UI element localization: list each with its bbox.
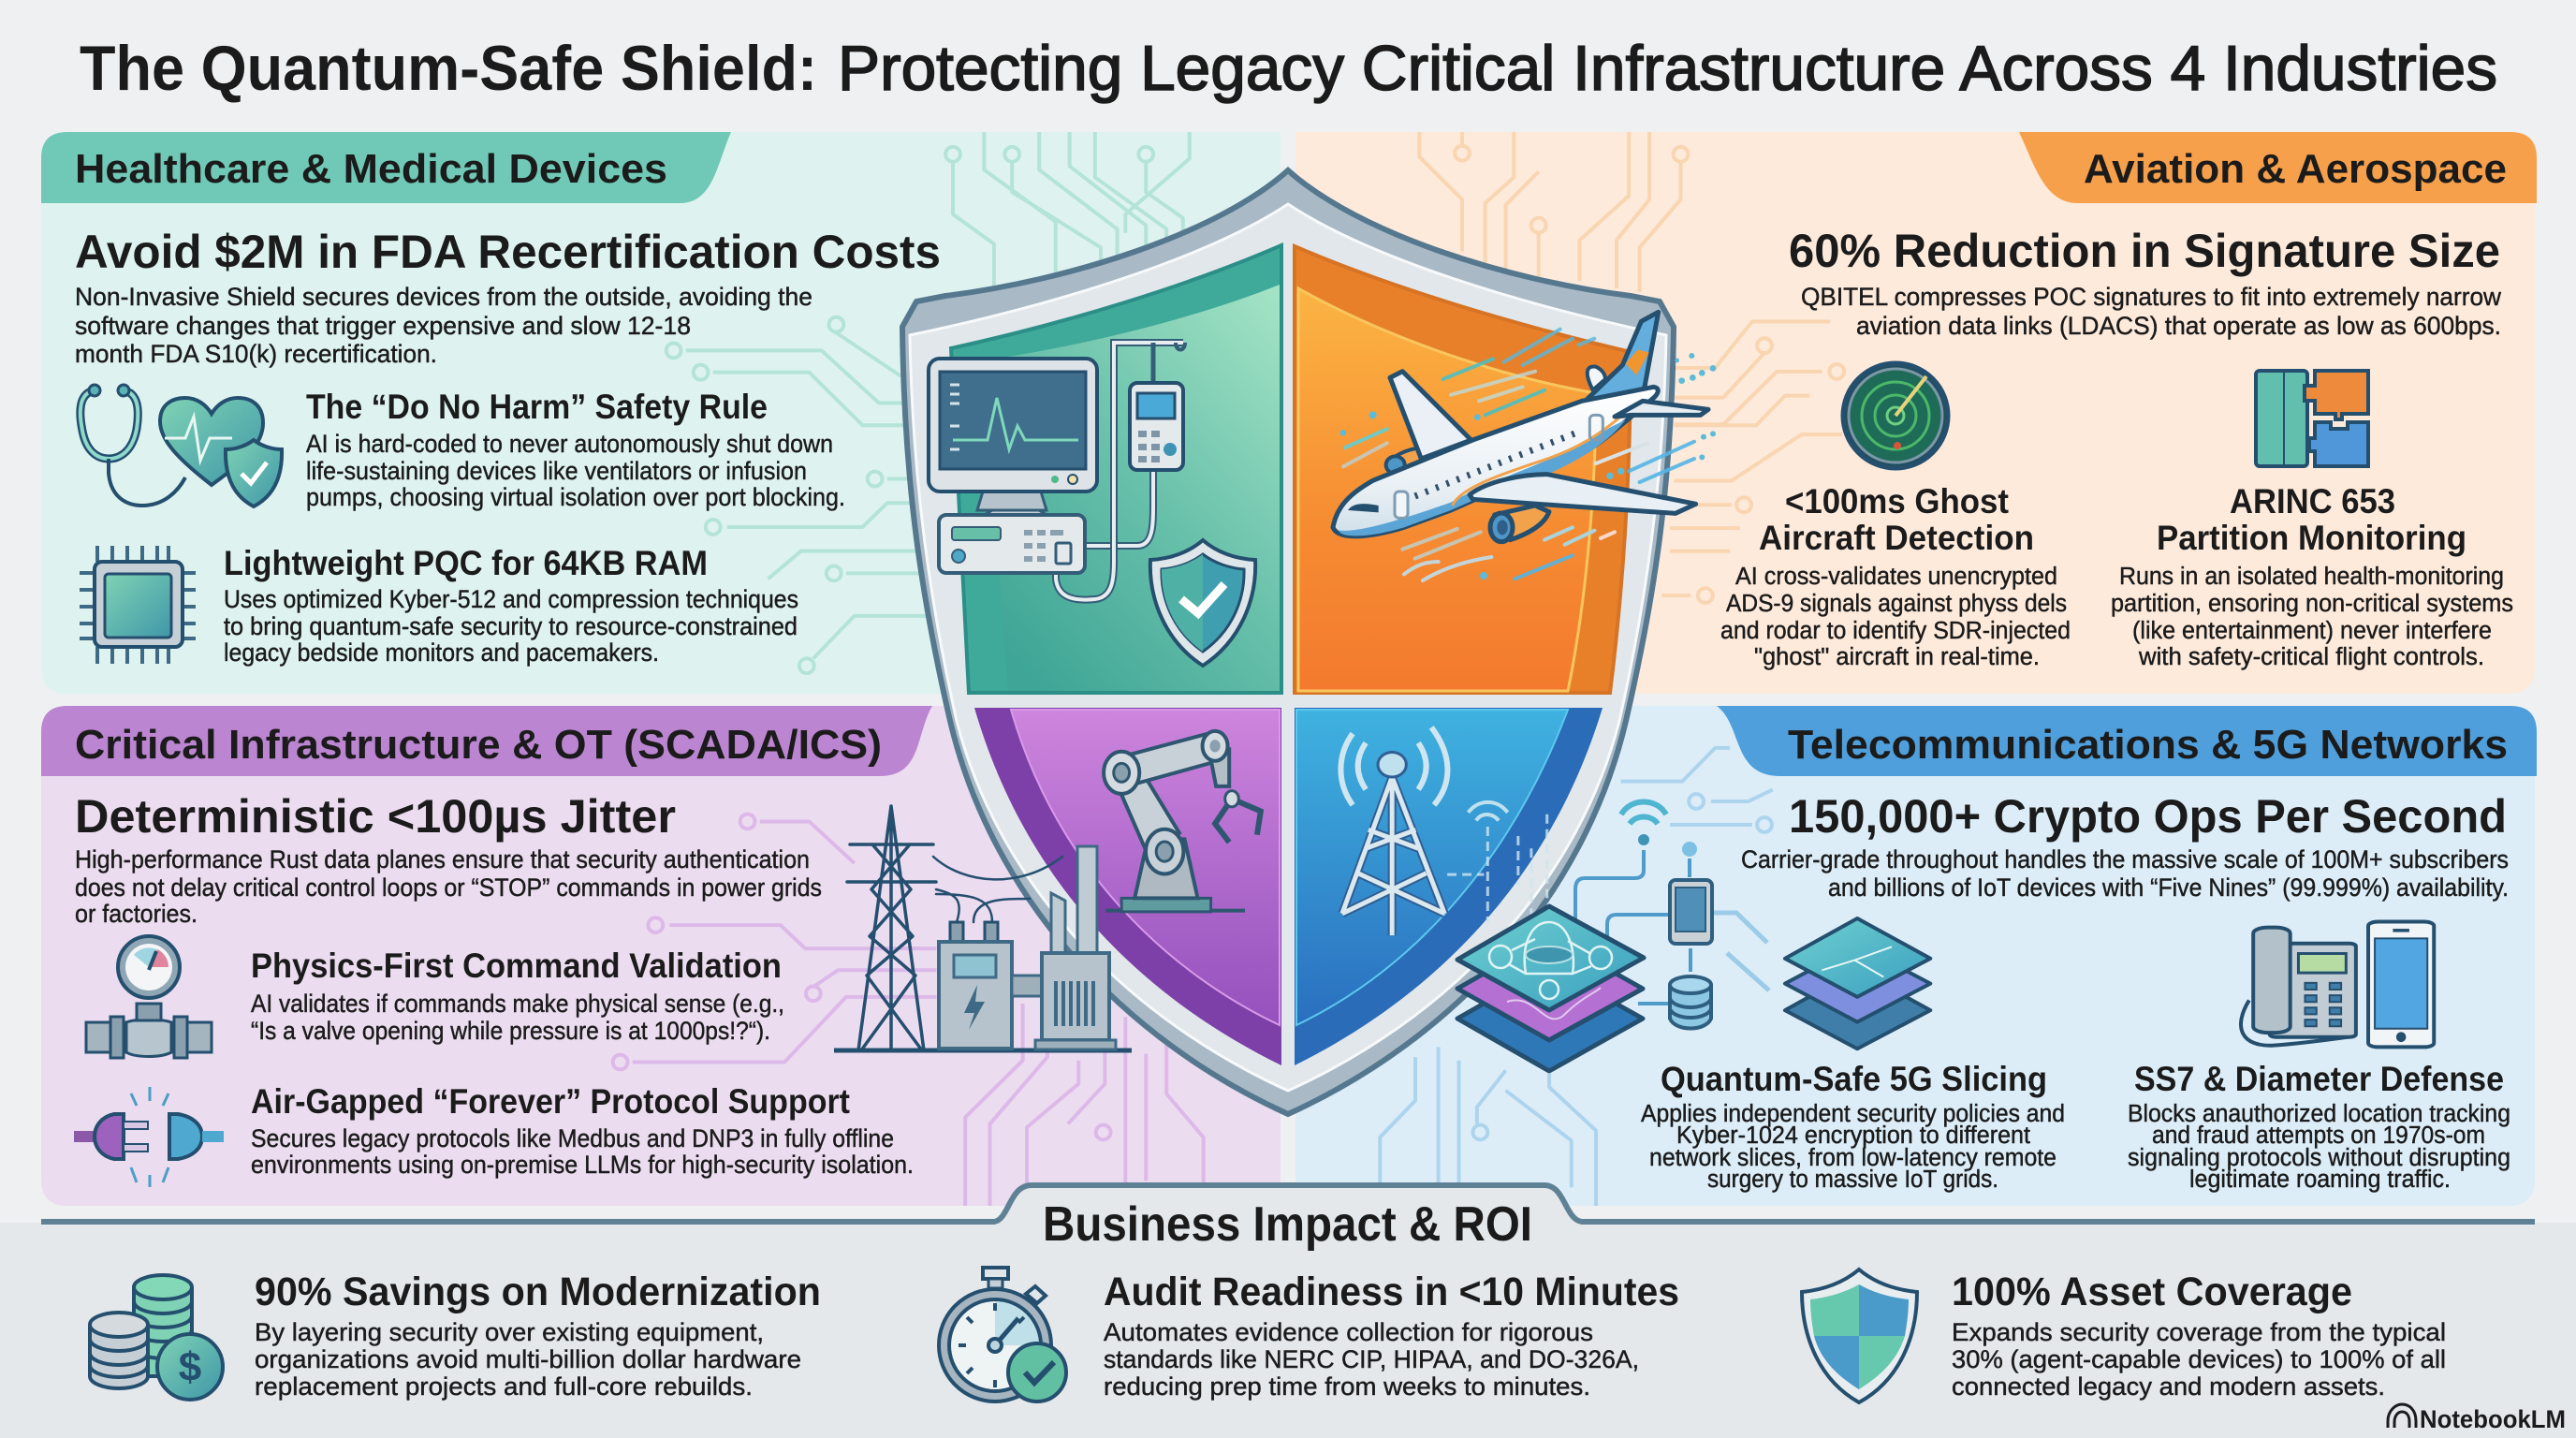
telecom section heading: Telecommunications & 5G Networks — [1788, 722, 2508, 768]
aviation headline: 60% Reduction in Signature Size — [1789, 225, 2500, 277]
near wing — [1470, 475, 1696, 513]
brand mark: NotebookLM: NotebookLM — [2420, 1405, 2566, 1433]
aviation header tab — [2019, 132, 2537, 203]
illustration: network slices and devices — [1457, 801, 1769, 1071]
icon: check shield in healthcare quadrant — [1150, 540, 1255, 666]
feature: ARINC 653 partition monitoring: partition, ensoring non-critical systems — [2111, 591, 2513, 617]
near engine — [1495, 506, 1549, 540]
critical infrastructure header tab — [41, 706, 932, 776]
telecom description: and billions of IoT devices with “Five Nines” (99.999%) availability. — [1828, 873, 2509, 902]
healthcare description: month FDA S10(k) recertification. — [75, 340, 437, 368]
feature: ghost aircraft detection: ADS-9 signals against physs dels — [1726, 591, 2067, 617]
feature: quantum-safe 5G slicing — [1641, 1060, 2065, 1193]
connector traces — [1575, 850, 1690, 1004]
feature: lightweight PQC — [224, 544, 798, 667]
title: The Quantum-Safe Shield: — [80, 33, 817, 104]
panel: healthcare and medical devices — [41, 132, 1281, 694]
feature: quantum-safe 5G slicing: surgery to massive IoT grids. — [1707, 1167, 1998, 1193]
icon: stethoscope, heart and shield — [80, 385, 282, 506]
telecom circuit traces — [1380, 748, 1773, 1206]
critical infrastructure panel background — [41, 706, 1281, 1206]
icon: radar — [1843, 363, 1948, 468]
icon: quartered shield — [1802, 1269, 1917, 1402]
transformer — [939, 922, 1042, 1049]
feature: lightweight PQC: Lightweight PQC for 64KB RAM — [224, 544, 708, 582]
feature: SS7 and Diameter defense: and fraud attempts on 1970s-om — [2152, 1123, 2485, 1149]
feature: quantum-safe 5G slicing: Kyber-1024 encryption to different — [1676, 1123, 2030, 1149]
icon: pressure gauge on valve — [86, 936, 212, 1058]
feature: ghost aircraft detection: "ghost" aircraft in real-time. — [1754, 644, 2040, 670]
stat: savings on modernization: By layering security over existing equipment, — [255, 1318, 764, 1346]
feature: ARINC 653 partition monitoring: Runs in an isolated health-monitoring — [2119, 564, 2504, 590]
icon: network slice stack — [1785, 918, 1930, 1049]
feature: air-gapped protocol support — [251, 1082, 914, 1179]
feature: do no harm safety rule: pumps, choosing virtual isolation over port blocking. — [306, 483, 845, 511]
feature: quantum-safe 5G slicing: network slices, from low-latency remote — [1649, 1145, 2056, 1171]
feature: physics-first command validation: “Is a valve opening while pressure is at 1000ps!?“). — [251, 1017, 770, 1045]
illustration: patient monitor and infusion pump — [929, 343, 1185, 600]
shield quadrant: healthcare — [951, 245, 1281, 693]
healthcare description — [75, 283, 812, 368]
feature: ARINC 653 partition monitoring: with safety-critical flight controls. — [2138, 644, 2484, 670]
stat: savings on modernization: replacement projects and full-core rebuilds. — [255, 1372, 753, 1401]
feature: air-gapped protocol support: environments using on-premise LLMs for high-security isolation. — [251, 1151, 914, 1179]
shield quadrant: critical infrastructure — [974, 708, 1281, 1065]
feature: ARINC 653 partition monitoring — [2111, 482, 2513, 670]
database — [1670, 985, 1711, 1028]
wifi icon — [1621, 801, 1666, 824]
critical infrastructure description: High-performance Rust data planes ensure that security authentication — [75, 845, 810, 873]
feature: ghost aircraft detection: <100ms Ghost — [1785, 482, 2009, 521]
bottom band background — [0, 1185, 2576, 1438]
feature: do no harm safety rule: life-sustaining devices like ventilators or infusion — [306, 457, 807, 485]
stat: audit readiness — [1104, 1269, 1679, 1401]
critical infrastructure section heading: Critical Infrastructure & OT (SCADA/ICS) — [75, 722, 882, 768]
small phone — [1670, 880, 1712, 944]
stat: savings on modernization: organizations avoid multi-billion dollar hardware — [255, 1345, 801, 1373]
feature: lightweight PQC: to bring quantum-safe security to resource-constrained — [224, 612, 798, 640]
panel: business impact and ROI — [0, 1185, 2576, 1438]
aviation description: aviation data links (LDACS) that operate as low as 600bps. — [1856, 312, 2501, 340]
feature: SS7 and Diameter defense — [2128, 1060, 2510, 1193]
stat: asset coverage: 100% Asset Coverage — [1952, 1269, 2352, 1314]
illustration: power tower and substation — [834, 806, 1132, 1050]
feature: lightweight PQC: legacy bedside monitors and pacemakers. — [224, 638, 659, 667]
critical infrastructure description: does not delay critical control loops or “STOP” commands in power grids — [75, 873, 822, 902]
feature: do no harm safety rule: The “Do No Harm” Safety Rule — [306, 388, 768, 426]
stat: audit readiness: Automates evidence collection for rigorous — [1104, 1318, 1593, 1346]
critical infrastructure description: or factories. — [75, 900, 198, 928]
feature: ghost aircraft detection: and rodar to identify SDR-injected — [1720, 618, 2071, 644]
telecom header tab — [1717, 706, 2537, 776]
healthcare header tab — [41, 132, 731, 203]
panel: aviation and aerospace — [1295, 132, 2537, 694]
telecom headline: 150,000+ Crypto Ops Per Second — [1789, 790, 2507, 843]
stat: asset coverage: 30% (agent-capable devices) to 100% of all — [1952, 1345, 2446, 1373]
critical infrastructure headline: Deterministic <100µs Jitter — [75, 790, 676, 843]
purple slice — [1457, 936, 1643, 1040]
feature: physics-first command validation: Physics-First Command Validation — [251, 946, 782, 985]
feature: air-gapped protocol support: Secures legacy protocols like Medbus and DNP3 in fully offline — [251, 1124, 894, 1152]
feature: quantum-safe 5G slicing: Quantum-Safe 5G Slicing — [1661, 1060, 2047, 1098]
stat: savings on modernization — [255, 1269, 821, 1401]
shield quadrant: telecommunications — [1295, 708, 1603, 1065]
telecom panel background — [1295, 706, 2535, 1206]
feature: physics-first command validation: AI validates if commands make physical sense (e.g., — [251, 990, 784, 1018]
feature: ghost aircraft detection: Aircraft Detection — [1759, 519, 2034, 557]
small tail fillet — [1588, 366, 1605, 390]
illustration: telecom tower — [1340, 727, 1547, 935]
feature: air-gapped protocol support: Air-Gapped “Forever” Protocol Support — [251, 1082, 850, 1121]
feature: SS7 and Diameter defense: Blocks anauthorized location tracking — [2128, 1101, 2510, 1127]
feature: physics-first command validation — [251, 946, 784, 1045]
feature: ghost aircraft detection: AI cross-validates unencrypted — [1735, 564, 2057, 590]
aviation description: QBITEL compresses POC signatures to fit into extremely narrow — [1801, 283, 2501, 311]
icon: stopwatch with check — [939, 1268, 1066, 1401]
cockpit window — [1348, 504, 1379, 512]
telecom description — [1741, 845, 2509, 902]
central quantum-safe shield — [902, 170, 1674, 1114]
feature: ARINC 653 partition monitoring: ARINC 653 — [2230, 482, 2395, 521]
telecom description: Carrier-grade throughout handles the massive scale of 100M+ subscribers — [1741, 845, 2509, 873]
doors — [1395, 492, 1408, 518]
stat: savings on modernization: 90% Savings on Modernization — [255, 1269, 821, 1314]
feature: do no harm safety rule — [306, 388, 845, 511]
aviation description — [1801, 283, 2501, 340]
feature: ARINC 653 partition monitoring: Partition Monitoring — [2157, 519, 2466, 557]
stat: asset coverage — [1952, 1269, 2446, 1401]
title: Protecting Legacy Critical Infrastructure Across 4 Industries — [838, 33, 2497, 104]
feature: quantum-safe 5G slicing: Applies independent security policies and — [1641, 1101, 2065, 1127]
healthcare section heading: Healthcare & Medical Devices — [75, 146, 667, 192]
feature: do no harm safety rule: AI is hard-coded to never autonomously shut down — [306, 430, 833, 458]
stat: audit readiness: standards like NERC CIP, HIPAA, and DO-326A, — [1104, 1345, 1639, 1373]
far wing and engine — [1388, 448, 1426, 473]
factory with chimneys — [1035, 846, 1116, 1049]
feature: SS7 and Diameter defense: legitimate roaming traffic. — [2189, 1167, 2451, 1193]
illustration: airplane with speed lines — [1333, 312, 1716, 580]
healthcare circuit traces — [666, 132, 1190, 673]
icon: coin stacks — [90, 1275, 223, 1400]
stabilizer — [1615, 401, 1708, 417]
belly shading — [1339, 419, 1626, 536]
feature: ARINC 653 partition monitoring: (like entertainment) never interfere — [2132, 618, 2492, 644]
aviation circuit traces — [1419, 132, 1844, 603]
healthcare description: software changes that trigger expensive and slow 12-18 — [75, 312, 691, 340]
icon: coin stacks: $ — [179, 1344, 201, 1390]
stat: asset coverage: connected legacy and modern assets. — [1952, 1372, 2385, 1401]
healthcare description: Non-Invasive Shield secures devices from the outside, avoiding the — [75, 283, 812, 311]
icon: partition blocks — [2256, 371, 2368, 466]
fuselage — [1333, 387, 1658, 536]
feature: SS7 and Diameter defense: SS7 & Diameter Defense — [2134, 1060, 2504, 1098]
icon: disconnected plug and socket — [74, 1087, 224, 1187]
aviation section heading: Aviation & Aerospace — [2084, 146, 2507, 192]
critical infrastructure circuit traces — [613, 814, 1204, 1206]
shield outer frame — [902, 170, 1674, 1114]
illustration: robotic arm — [1104, 731, 1261, 912]
tail fin — [1582, 312, 1659, 404]
blue slice — [1457, 966, 1643, 1071]
transmission tower — [847, 806, 1062, 1050]
healthcare panel background — [41, 132, 1281, 694]
stat: audit readiness: reducing prep time from weeks to minutes. — [1104, 1372, 1590, 1401]
healthcare headline: Avoid $2M in FDA Recertification Costs — [75, 226, 941, 278]
panel: critical infrastructure and OT — [41, 706, 1281, 1206]
shield quadrant: aviation — [1295, 246, 1631, 693]
feature: ghost aircraft detection — [1720, 482, 2071, 670]
teal slice — [1457, 906, 1644, 1010]
bottom band rule and tab outline — [41, 1185, 2535, 1222]
panel: telecommunications and 5G — [1295, 706, 2537, 1206]
icon: microchip — [80, 546, 196, 664]
title — [80, 33, 2497, 104]
bottom band heading: Business Impact & ROI — [1043, 1197, 1532, 1252]
stat: audit readiness: Audit Readiness in <10 Minutes — [1104, 1269, 1679, 1314]
cabin windows — [1415, 431, 1582, 496]
stat: asset coverage: Expands security coverage from the typical — [1952, 1318, 2446, 1346]
ground line — [834, 1049, 1132, 1052]
feature: lightweight PQC: Uses optimized Kyber-512 and compression techniques — [224, 585, 798, 613]
critical infrastructure description — [75, 845, 822, 928]
shield inner rim — [910, 204, 1666, 1091]
icon: desk phone and smartphone — [2241, 922, 2434, 1047]
feature: SS7 and Diameter defense: signaling protocols without disrupting — [2128, 1145, 2510, 1171]
speed lines — [1343, 330, 1694, 580]
aviation panel background — [1295, 132, 2535, 694]
